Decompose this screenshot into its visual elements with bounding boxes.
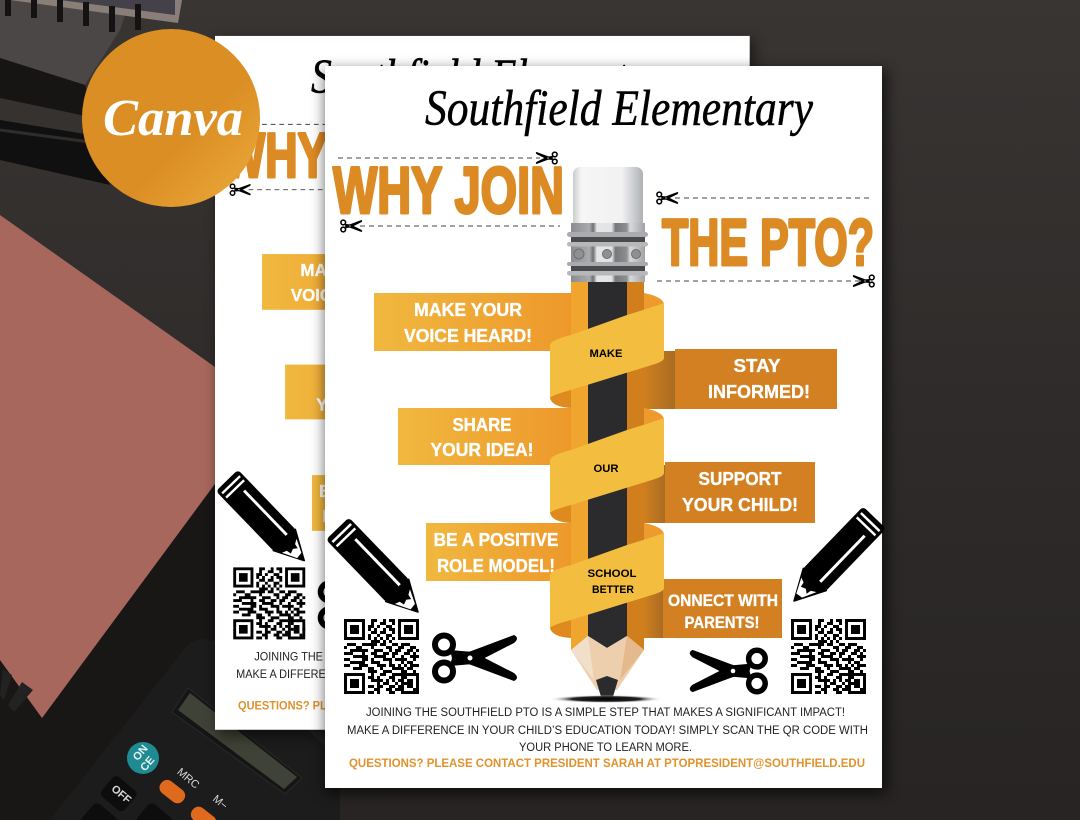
ribbon band: make: MAKE: [590, 348, 622, 360]
icon: left scissors: [435, 635, 517, 681]
footer text: YOUR PHONE TO LEARN MORE.: [519, 740, 692, 754]
ribbon: make your voice heard: [374, 293, 572, 351]
pencil illustration: [549, 167, 663, 703]
pencil eraser: [573, 167, 643, 233]
calculator labels: OFF: [109, 783, 133, 807]
back poster shadow: [218, 40, 754, 736]
icon: right scissors: [690, 650, 765, 692]
footer text: JOINING THE SOUTHFIELD PTO IS A SIMPLE STEP THAT MAKES A SIGNIFICANT IMPACT!: [366, 705, 845, 719]
calculator labels: CE: [138, 754, 157, 774]
front poster: [325, 66, 886, 788]
calculator labels: [109, 743, 230, 812]
ribbon: connect with parents: PARENTS!: [684, 614, 760, 632]
qr code left: [344, 619, 419, 694]
calculator: [50, 639, 340, 820]
calculator labels: MRC: [174, 766, 201, 791]
ribbon: make your voice heard: MAKE YOUR: [414, 300, 522, 320]
ribbon: be a positive role model: [426, 523, 572, 581]
footer text: MAKE A DIFFERENCE IN YOUR CHILD’S EDUCATION TODAY! SIMPLY SCAN THE QR CODE WITH: [347, 723, 868, 737]
title: school name: Southfield Elementary: [425, 81, 813, 137]
ribbon: connect with parents: [644, 579, 782, 638]
ribbon: share your idea: YOUR IDEA!: [430, 440, 534, 460]
heading: why join: WHY JOIN: [333, 153, 564, 227]
ribbon: stay informed: STAY: [734, 356, 780, 376]
canva badge: [82, 29, 260, 207]
heading: the pto: THE PTO?: [662, 205, 874, 279]
ribbon band: our: OUR: [594, 463, 619, 475]
ribbon: share your idea: [398, 408, 572, 465]
canva badge: Canva: [103, 90, 243, 147]
ribbon: support your child: [644, 462, 815, 523]
ribbon: stay informed: [644, 349, 837, 409]
ribbon band: our: [550, 408, 664, 523]
footer text: [347, 705, 868, 770]
pencil ferrule: [567, 223, 648, 282]
ribbon band: school better: BETTER: [592, 584, 634, 596]
ribbon: support your child: SUPPORT: [698, 469, 782, 489]
pencil wood tip: [571, 636, 644, 700]
icon: left pencil: [326, 517, 430, 623]
contact line: QUESTIONS? PLEASE CONTACT PRESIDENT SARAH AT PTOPRESIDENT@SOUTHFIELD.EDU: [349, 756, 865, 770]
icon: right pencil: [782, 506, 886, 612]
ribbon band: school better: [550, 523, 664, 638]
ribbon: share your idea: SHARE: [452, 415, 512, 435]
dashed cut lines with scissors: [338, 152, 874, 287]
back poster: [215, 36, 754, 730]
ribbon: make your voice heard: VOICE HEARD!: [404, 326, 532, 346]
calculator labels: M−: [210, 793, 230, 812]
ribbon band: make: [550, 293, 664, 408]
ribbon: be a positive role model: ROLE MODEL!: [437, 556, 555, 576]
ribbon: support your child: YOUR CHILD!: [682, 495, 798, 515]
front poster shadow: [325, 70, 887, 794]
calculator buttons: [80, 742, 219, 820]
qr code right: [791, 619, 866, 694]
pink notebook: [0, 215, 240, 820]
pencil shadow: [549, 695, 663, 703]
ribbon: be a positive role model: BE A POSITIVE: [434, 530, 558, 550]
calculator labels: ON: [131, 743, 151, 763]
black notebook with spiral binding: [0, 0, 182, 85]
ribbon: stay informed: INFORMED!: [708, 382, 810, 402]
pencil body: [571, 282, 644, 650]
ribbon band: school better: SCHOOL: [588, 568, 637, 580]
ribbon: connect with parents: ONNECT WITH: [668, 592, 778, 610]
black pens: [0, 58, 110, 185]
